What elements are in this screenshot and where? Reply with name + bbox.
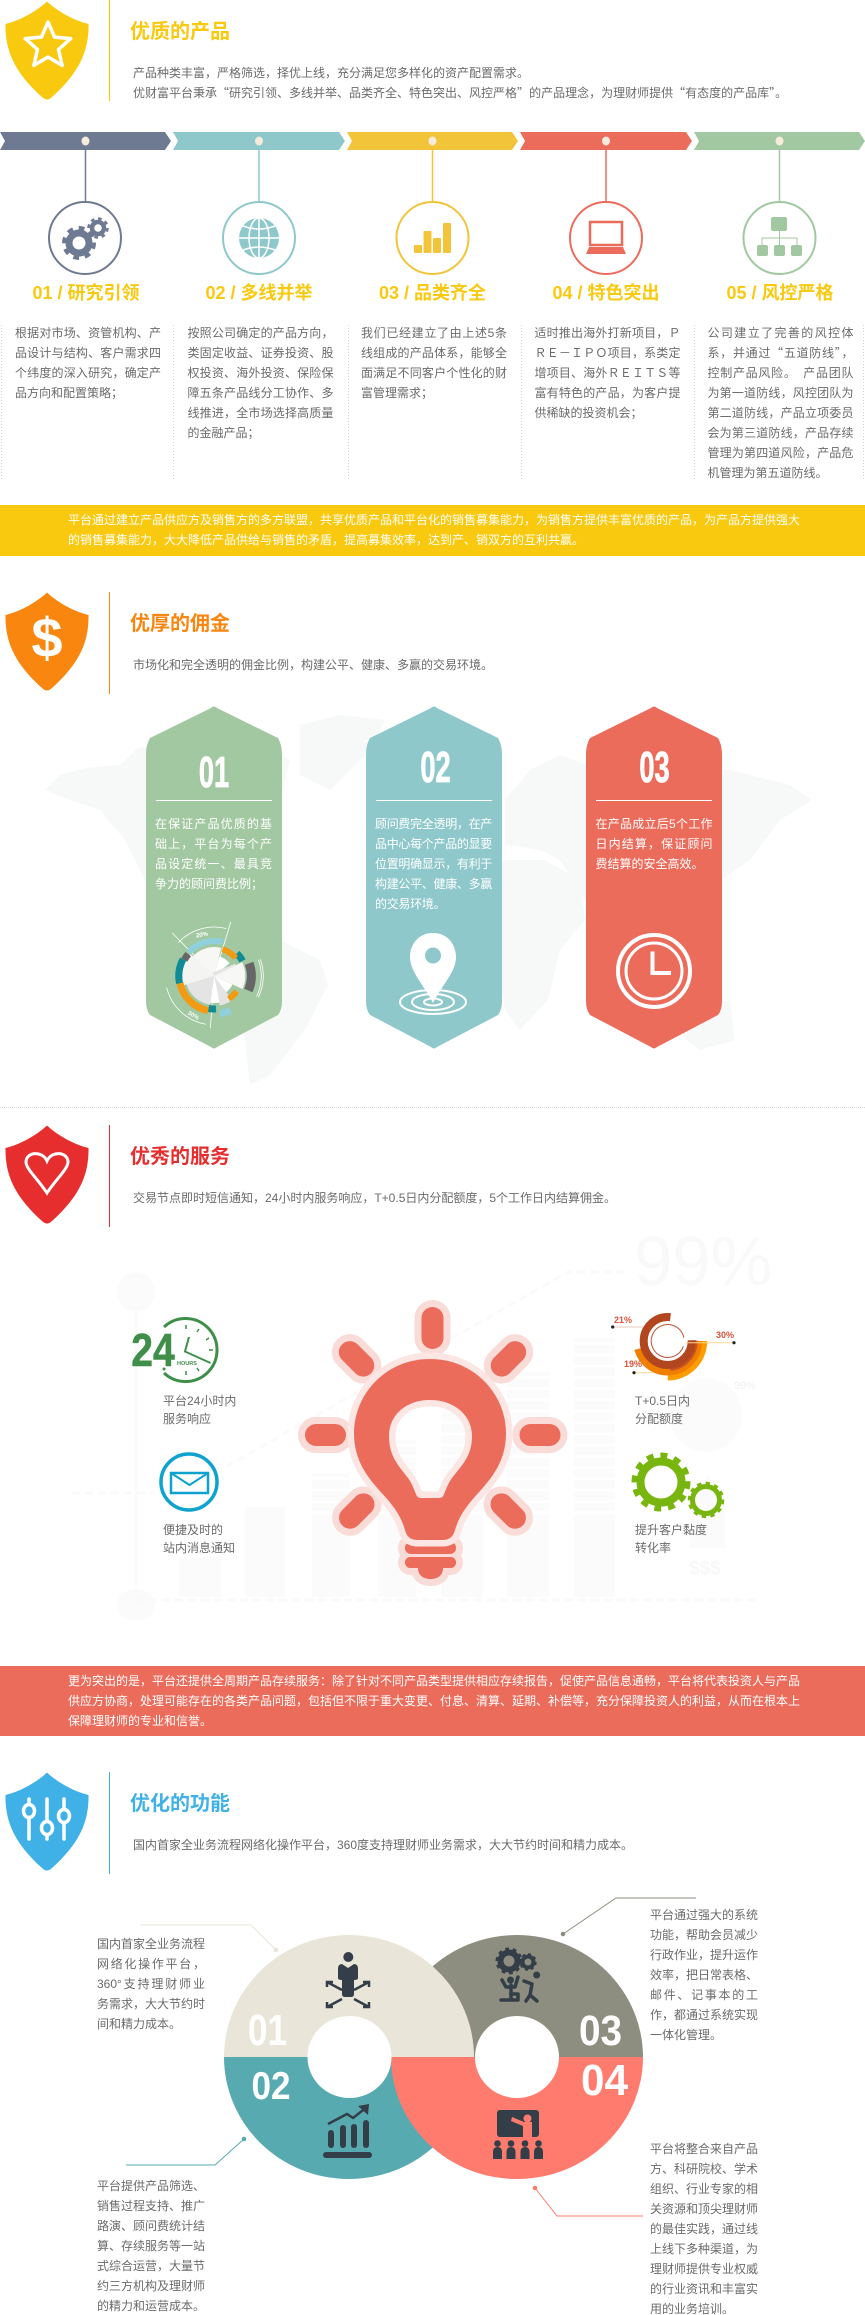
column text 05 xyxy=(708,326,854,480)
callout text 01: 网络化操作平台， xyxy=(97,1957,205,1971)
heading rule xyxy=(109,0,110,101)
icon: donut chart: 19% xyxy=(624,1359,642,1369)
column text 03 xyxy=(361,326,507,400)
callout band: red xyxy=(0,1666,865,1736)
intro text: 交易节点即时短信通知，24小时内服务响应，T+0.5日内分配额度，5个工作日内结算佣金。 xyxy=(133,1191,616,1205)
icon: donut chart: 21% xyxy=(614,1315,632,1325)
callout text 03: 行政作业，提升运作 xyxy=(650,1948,758,1962)
callout text 04: 平台将整合来自产品 xyxy=(650,2142,758,2156)
faint background chart: $$$ xyxy=(689,1558,721,1579)
callout text 03: 一体化管理。 xyxy=(650,2028,722,2042)
icon: presenter and audience xyxy=(493,2110,543,2159)
leader line 03 xyxy=(561,1898,696,1936)
callout text 02: 算、存续服务等一站 xyxy=(97,2239,205,2253)
icon: green gears xyxy=(634,1456,722,1516)
heading rule xyxy=(109,1125,110,1227)
callout text 01: 国内首家全业务流程 xyxy=(97,1937,205,1951)
heading rule xyxy=(109,1772,110,1874)
column text 02: 的金融产品； xyxy=(188,426,260,440)
segment 03 xyxy=(391,1935,643,2057)
callout text 04: 的最佳实践，通过线 xyxy=(650,2222,758,2236)
icon: laptop in circle xyxy=(570,150,642,274)
column text 04 xyxy=(534,326,680,420)
callout text 04 xyxy=(650,2142,758,2315)
hexagon card 01 xyxy=(145,706,284,1048)
item text: stickiness: 转化率 xyxy=(635,1541,671,1555)
item text: notice xyxy=(163,1523,235,1555)
icon: 24 hours clock: HOURS xyxy=(177,1361,197,1367)
icon: yellow shield with star xyxy=(5,2,89,100)
icon: light bulb xyxy=(305,1307,560,1579)
card text 01: 在保证产品优质的基 xyxy=(155,817,272,831)
card text 01: 础上，平台为每个产 xyxy=(155,837,272,851)
callout text 01: 务需求，大大节约时 xyxy=(97,1997,205,2011)
item text: stickiness: 提升客户黏度 xyxy=(635,1523,707,1537)
chevron 4 xyxy=(520,132,692,150)
card text 02 xyxy=(375,817,492,911)
callout text 04: 的行业资讯和丰富实 xyxy=(650,2282,758,2296)
icon: orange shield with dollar xyxy=(5,592,89,690)
callout text 02 xyxy=(97,2179,205,2313)
column text 05: 第二道防线，产品立项委员 xyxy=(708,406,854,420)
callout text 04: 上线下多种渠道，为 xyxy=(650,2242,758,2256)
item text: notice: 站内消息通知 xyxy=(163,1541,235,1555)
segment 01 xyxy=(224,1935,474,2057)
column text 03: 富管理需求； xyxy=(361,386,433,400)
icon: 24 hours clock: 24 xyxy=(131,1325,175,1377)
divider xyxy=(0,1107,865,1108)
column text 02: 权投资、海外投资、保险保 xyxy=(188,366,334,380)
leader line 04 xyxy=(533,2186,643,2216)
item text: 24 hours xyxy=(163,1394,236,1426)
icon: donut chart xyxy=(611,1305,736,1377)
faint background chart: 99% xyxy=(734,1380,756,1392)
ring diagram xyxy=(224,1935,643,2179)
column text 02: 线推进，全市场选择高质量 xyxy=(188,406,334,420)
heading rule xyxy=(109,592,110,694)
callout band: yellow: 平台通过建立产品供应方及销售方的多方联盟，共享优质产品和平台化的销售募集能力，为销售方提供丰富优质的产品，为产品方提供强大 xyxy=(68,513,800,527)
column text 05: 控制产品风险。 产品团队 xyxy=(708,366,854,380)
label 03: 03 / 品类齐全 xyxy=(379,283,486,303)
panel: 优秀的服务 xyxy=(0,1125,865,1736)
heading: 优厚的佣金: 优厚的佣金 xyxy=(130,613,230,635)
callout text 03: 邮件、记事本的工 xyxy=(650,1988,758,2002)
callout text 04: 组织、行业专家的相 xyxy=(650,2182,758,2196)
card text 03 xyxy=(596,817,712,871)
panel: 优质的产品 xyxy=(0,0,865,556)
column separators xyxy=(2,325,864,480)
column text 05: 会为第三道防线，产品存续 xyxy=(708,426,854,440)
hexagon card 02: 02 xyxy=(420,742,451,792)
callout text 04: 方、科研院校、学术 xyxy=(650,2162,758,2176)
chart: radial xyxy=(145,907,284,1045)
column text 02: 按照公司确定的产品方向， xyxy=(188,326,334,340)
icon: org chart in circle xyxy=(744,150,816,274)
icon: rising chart xyxy=(323,2104,372,2158)
intro text: 国内首家全业务流程网络化操作平台，360度支持理财师业务需求，大大节约时间和精力成本。 xyxy=(133,1838,633,1852)
callout band: red: 更为突出的是，平台还提供全周期产品存续服务：除了针对不同产品类型提供相应存续报告，促使产品信息通畅，平台将代表投资人与产品 xyxy=(68,1674,800,1688)
item text: allocation: T+0.5日内 xyxy=(635,1394,690,1408)
column text 02 xyxy=(188,326,334,440)
heading: 优化的功能: 优化的功能 xyxy=(130,1793,230,1815)
item text: notice: 便捷及时的 xyxy=(163,1523,223,1537)
callout text 01: 360°支持理财师业 xyxy=(97,1977,205,1991)
label 05: 05 / 风控严格 xyxy=(726,283,834,303)
column text 04: 适时推出海外打新项目，Ｐ xyxy=(534,326,680,340)
hexagon card 02 xyxy=(366,706,502,1048)
callout text 03: 效率，把日常表格、 xyxy=(650,1968,758,1982)
card text 03: 在产品成立后5个工作 xyxy=(596,817,712,831)
icon: 24 hours clock xyxy=(131,1318,217,1382)
card text 02: 构建公平、健康、多赢 xyxy=(375,877,492,891)
callout text 02: 路演、顾问费统计结 xyxy=(97,2219,205,2233)
callout text 03: 作，都通过系统实现 xyxy=(650,2008,758,2022)
icon: mail xyxy=(161,1454,217,1510)
label 02: 02 / 多线并举 xyxy=(205,283,313,303)
segment 02 xyxy=(224,2057,474,2179)
chevron 1 xyxy=(0,132,171,150)
icon: red shield with heart xyxy=(5,1126,89,1224)
card text 02: 品中心每个产品的显要 xyxy=(375,837,492,851)
chevron 3 xyxy=(347,132,518,150)
panel: 优厚的佣金 xyxy=(5,592,722,1048)
column text 04: ＲＥ－ＩＰＯ项目，系类定 xyxy=(534,346,680,360)
column text 02: 类固定收益、证券投资、股 xyxy=(188,346,334,360)
faint background chart xyxy=(72,1222,772,1621)
intro text: 市场化和完全透明的佣金比例，构建公平、健康、多赢的交易环境。 xyxy=(133,658,493,672)
callout band: yellow xyxy=(0,505,865,556)
icon: donut chart: 30% xyxy=(716,1330,734,1340)
card text 01: 争力的顾问费比例； xyxy=(155,877,263,891)
card text 02: 的交易环境。 xyxy=(375,897,445,911)
callout text 03: 功能，帮助会员减少 xyxy=(650,1928,758,1942)
column text 05: 系，并通过“五道防线”， xyxy=(708,344,853,361)
callout text 02: 约三方机构及理财师 xyxy=(97,2279,205,2293)
callout text 02: 平台提供产品筛选、 xyxy=(97,2179,205,2193)
icon: orange shield with dollar: $ xyxy=(31,606,63,669)
column text 03: 面满足不同客户个性化的财 xyxy=(361,366,507,380)
number 01: 01 xyxy=(248,2006,287,2055)
card text 03: 日内结算，保证顾问 xyxy=(596,837,712,851)
column text 02: 障五条产品线分工协作、多 xyxy=(188,386,334,400)
chart: radial: 20% xyxy=(196,931,209,940)
card text 02: 位置明确显示，有利于 xyxy=(375,857,492,871)
icon: person with arrows xyxy=(327,1952,369,2007)
column text 01: 品方向和配置策略； xyxy=(15,386,123,400)
panel: 优化的功能 xyxy=(5,1772,758,2315)
column text 04: 富有特色的产品，为客户提 xyxy=(534,386,680,400)
item text: 24 hours: 平台24小时内 xyxy=(163,1394,236,1408)
number 02: 02 xyxy=(251,2063,291,2107)
icon: gears in circle xyxy=(49,150,121,274)
column text 01 xyxy=(15,326,161,400)
column text 03: 线组成的产品体系，能够全 xyxy=(361,346,507,360)
chevron 5 xyxy=(694,132,865,150)
callout text 02: 式综合运营，大量节 xyxy=(97,2259,205,2273)
card text 03: 费结算的安全高效。 xyxy=(596,857,704,871)
column text 05: 为第一道防线，风控团队为 xyxy=(708,386,854,400)
icon: location pin xyxy=(400,933,466,1014)
column text 04: 供稀缺的投资机会； xyxy=(534,406,643,420)
column text 01: 品设计与结构、客户需求四 xyxy=(15,346,161,360)
heading: 优质的产品: 优质的产品 xyxy=(130,21,230,43)
column text 05: 管理为第四道风险，产品危 xyxy=(708,446,854,460)
icon: bars in circle xyxy=(396,150,468,274)
callout band: red: 供应方协商，处理可能存在的各类产品问题，包括但不限于重大变更、付息、清算、延期、补偿等，充分保障投资人的利益，从而在根本上 xyxy=(68,1694,800,1708)
card text 01: 品设定统一、最具竞 xyxy=(155,857,272,871)
label 01: 01 / 研究引领 xyxy=(32,283,140,303)
column text 05: 机管理为第五道防线。 xyxy=(708,466,828,480)
callout band: red: 保障理财师的专业和信誉。 xyxy=(68,1714,212,1728)
intro text: 优财富平台秉承“研究引领、多线并举、品类齐全、特色突出、风控严格”的产品理念，为理财师提供“有态度的产品库”。 xyxy=(133,84,787,101)
callout band: yellow: 的销售募集能力，大大降低产品供给与销售的矛盾，提高募集效率，达到产、销双方的互利共赢。 xyxy=(68,533,584,547)
column text 03: 我们已经建立了由上述5条 xyxy=(361,326,507,340)
item text: 24 hours: 服务响应 xyxy=(163,1412,211,1426)
leader line 02 xyxy=(126,2137,246,2165)
hexagon card 01: 01 xyxy=(199,747,229,797)
heading: 优秀的服务: 优秀的服务 xyxy=(130,1146,230,1168)
hexagon card 03 xyxy=(586,706,722,1048)
callout text 01: 间和精力成本。 xyxy=(97,2017,181,2031)
world map background xyxy=(45,715,812,1085)
icon: gears and people xyxy=(497,1949,540,2001)
column text 04: 增项目、海外ＲＥＩＴＳ等 xyxy=(534,366,680,380)
chart: radial: 30% xyxy=(186,1011,200,1022)
card text 01 xyxy=(155,817,272,891)
column text 01: 根据对市场、资管机构、产 xyxy=(15,326,161,340)
leader line 01 xyxy=(140,1925,278,1952)
column text 05: 公司建立了完善的风控体 xyxy=(708,326,854,340)
callout text 04: 理财师提供专业权威 xyxy=(650,2262,758,2276)
icon: blue shield with sliders xyxy=(5,1772,89,1870)
callout text 03 xyxy=(650,1908,758,2042)
segment 04 xyxy=(391,2057,643,2179)
callout text 04: 关资源和顶尖理财师 xyxy=(650,2202,758,2216)
label 04: 04 / 特色突出 xyxy=(552,283,660,303)
hexagon card 03: 03 xyxy=(639,742,670,792)
item text: allocation: 分配额度 xyxy=(635,1412,683,1426)
callout text 02: 销售过程支持、推广 xyxy=(97,2199,205,2213)
callout text 01 xyxy=(97,1937,205,2031)
callout text 03: 平台通过强大的系统 xyxy=(650,1908,758,1922)
column text 01: 个纬度的深入研究，确定产 xyxy=(15,366,161,380)
icon: clock xyxy=(618,935,690,1007)
number 03: 03 xyxy=(579,2006,622,2054)
icon: globe in circle xyxy=(223,150,295,274)
card text 02: 顾问费完全透明，在产 xyxy=(375,817,492,831)
item text: allocation xyxy=(635,1394,690,1426)
callout text 02: 的精力和运营成本。 xyxy=(97,2299,205,2313)
number 04: 04 xyxy=(581,2056,628,2105)
item text: stickiness xyxy=(635,1523,707,1555)
faint background chart: 99% xyxy=(634,1222,772,1300)
intro text: 产品种类丰富，严格筛选，择优上线，充分满足您多样化的资产配置需求。 xyxy=(133,66,529,80)
intro text xyxy=(133,66,787,101)
chevron 2 xyxy=(173,132,345,150)
